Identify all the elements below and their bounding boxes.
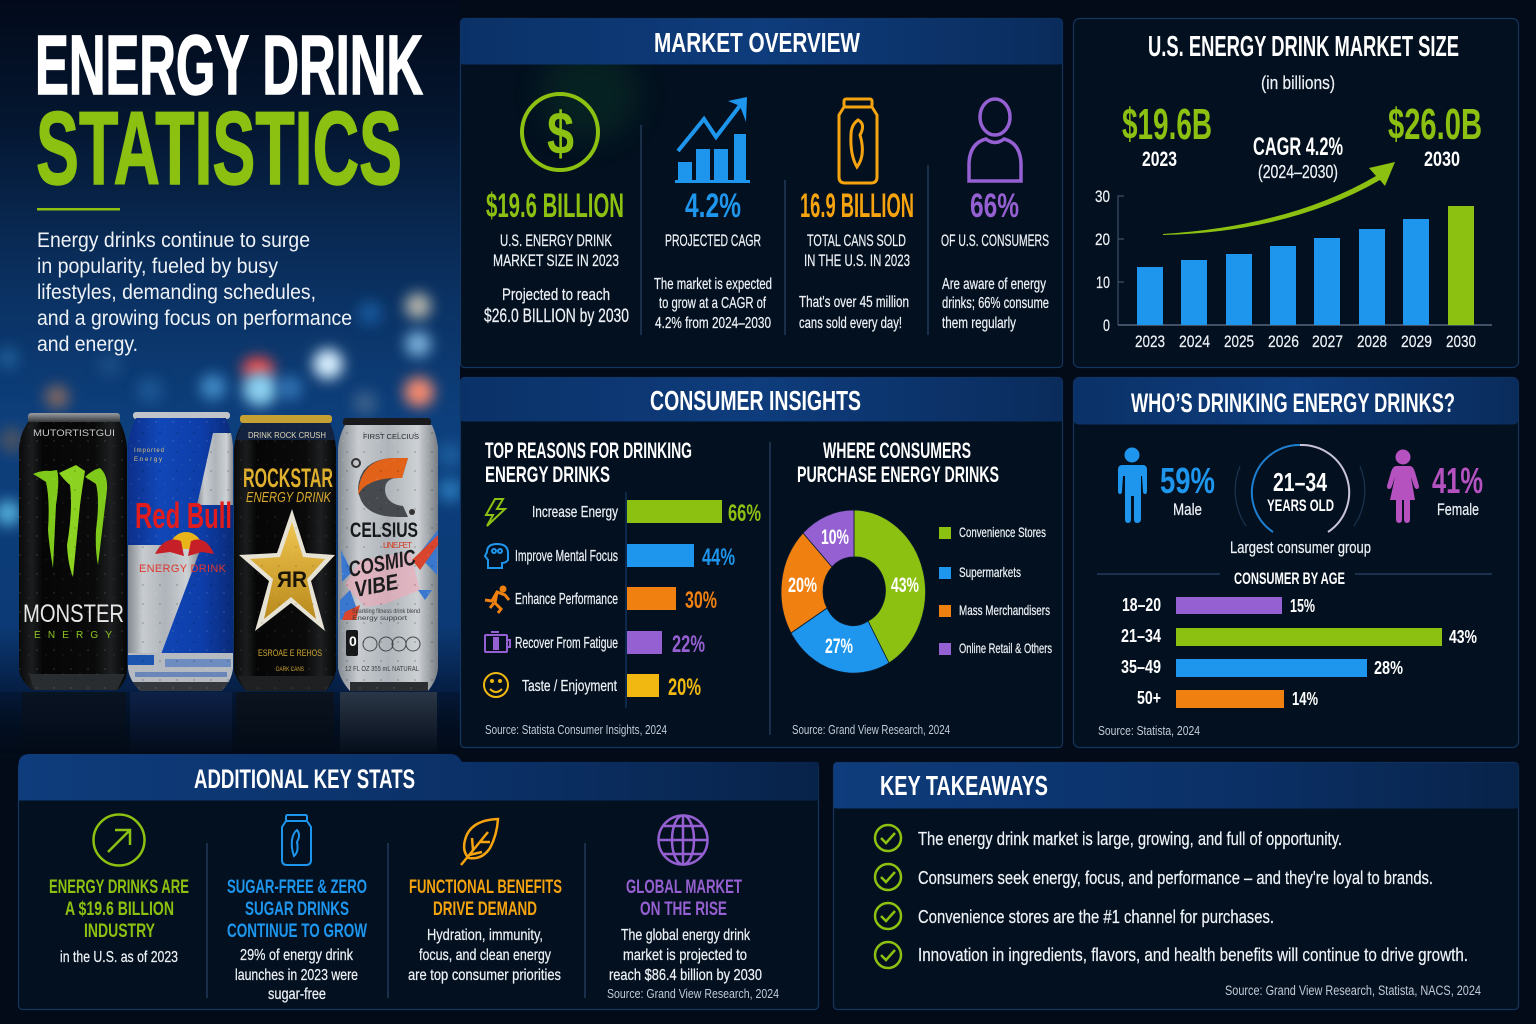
can: Monster: ENERGY — [34, 630, 112, 641]
icon: growth chart — [675, 97, 750, 183]
callout: 2030 value: 2030 — [1424, 148, 1460, 171]
heading: top reasons: TOP REASONS FOR DRINKING — [485, 438, 692, 463]
stat: global market: market is projected to — [623, 947, 747, 964]
stat: market size: U.S. ENERGY DRINK — [500, 231, 612, 250]
stat: sugar-free: 29% of energy drink — [240, 947, 354, 964]
bar chart: top reasons — [484, 492, 761, 708]
can: Celsius: CELSIUS — [350, 519, 418, 542]
donut chart: 10% — [821, 526, 849, 549]
can: Celsius: Energy support — [352, 616, 407, 622]
icon: lightning — [486, 499, 505, 526]
bar chart: top reasons: Improve Mental Focus — [515, 548, 618, 565]
panel: market size chart: (in billions) — [1261, 73, 1335, 93]
can: Rockstar — [234, 415, 336, 691]
can: Celsius: Sparkling fitness drink blend — [352, 609, 420, 615]
bar chart: top reasons: Enhance Performance — [515, 591, 618, 608]
bar chart: top reasons: 66% — [728, 500, 761, 527]
legend: Online Retail & Others — [959, 640, 1052, 656]
bar chart: 2025 — [1224, 332, 1254, 351]
panel: additional key stats — [18, 754, 818, 1010]
takeaway 1: The energy drink market is large, growing, and full of opportunity. — [918, 829, 1342, 849]
stat: global market: ON THE RISE — [640, 899, 727, 920]
stat: consumers: drinks; 66% consume — [942, 295, 1049, 312]
stat: market size: MARKET SIZE IN 2023 — [493, 251, 619, 270]
callout: 2030 value: $26.0B — [1388, 100, 1482, 149]
stat: global market: Source: Grand View Research, 2024 — [607, 986, 779, 1001]
stat: sugar-free: launches in 2023 were — [235, 967, 358, 984]
bar chart: age: 15% — [1290, 596, 1315, 616]
stat: male: 59% — [1160, 460, 1215, 501]
bar chart: top reasons: 44% — [702, 544, 735, 571]
donut chart: 27% — [825, 635, 853, 658]
stat: female: 41% — [1432, 460, 1483, 501]
icon: arrow circle — [94, 814, 144, 866]
bar chart: age: 21–34 — [1121, 626, 1161, 646]
bar chart: top reasons: 30% — [685, 587, 717, 614]
donut chart: 20% — [788, 574, 817, 597]
callout: CAGR: (2024–2030) — [1258, 162, 1338, 182]
bar chart: 2030 — [1446, 332, 1476, 351]
stat: CAGR: 4.2% — [685, 187, 741, 225]
bar chart: 20 — [1095, 230, 1110, 249]
stat: industry — [49, 814, 189, 966]
heading: top reasons — [485, 438, 692, 487]
stat: market size: $26.0 BILLION by 2030 — [484, 306, 629, 327]
legend — [939, 524, 1052, 656]
stat: female: Female — [1437, 500, 1479, 519]
stat: consumers: them regularly — [942, 315, 1016, 332]
intro text: lifestyles, demanding schedules, — [37, 281, 316, 304]
intro text — [37, 229, 352, 356]
heading: market overview — [460, 18, 1062, 64]
bar chart: age: 18–20 — [1122, 595, 1161, 615]
takeaway 2: Consumers seek energy, focus, and performance – and they're loyal to brands. — [918, 868, 1433, 888]
stat: sugar-free: CONTINUE TO GROW — [227, 921, 367, 942]
stat: market size: Projected to reach — [502, 285, 610, 304]
stat: consumers: OF U.S. CONSUMERS — [941, 231, 1049, 250]
stat: CAGR: to grow at a CAGR of — [659, 295, 766, 312]
can: Rockstar: ESROAE E REHOS — [258, 648, 322, 658]
stat: CAGR: PROJECTED CAGR — [665, 231, 761, 250]
heading: additional key stats: ADDITIONAL KEY STATS — [194, 764, 415, 794]
heading: consumer by age: CONSUMER BY AGE — [1234, 569, 1345, 588]
icon: smiley — [484, 673, 508, 697]
stat: market size: $19.6 BILLION — [486, 187, 624, 225]
stat: functional benefits: DRIVE DEMAND — [433, 899, 537, 920]
title — [35, 18, 423, 207]
heading: key takeaways — [834, 762, 1518, 808]
can: Red Bull — [128, 412, 234, 692]
stat: functional benefits: FUNCTIONAL BENEFITS — [409, 877, 562, 898]
heading: who's drinking — [1074, 378, 1518, 424]
stat: consumers: 66% — [970, 187, 1019, 225]
heading: where consumers purchase: WHERE CONSUMERS — [823, 438, 971, 463]
heading: top reasons: ENERGY DRINKS — [485, 462, 610, 487]
intro text: and a growing focus on performance — [37, 307, 352, 330]
stat: functional benefits: focus, and clean energy — [419, 947, 551, 964]
can: Celsius — [338, 418, 438, 691]
callout: 2023 value: $19.6B — [1122, 100, 1212, 149]
takeaway 4 — [875, 942, 1468, 968]
intro text: and energy. — [37, 333, 138, 356]
bar chart: top reasons: 20% — [668, 674, 701, 701]
can: Red Bull: Red Bull — [135, 495, 232, 536]
stat: sugar-free: SUGAR DRINKS — [245, 899, 349, 920]
icon: female — [1387, 450, 1419, 523]
product cans — [0, 412, 460, 754]
stat: functional benefits — [408, 819, 562, 984]
can: Celsius: LINE FET — [383, 541, 412, 550]
stat: industry: INDUSTRY — [84, 921, 155, 942]
icon: battery — [485, 632, 510, 652]
bar chart: age — [1121, 595, 1477, 709]
donut chart: 43% — [891, 574, 919, 597]
bar chart: 2023 — [1135, 332, 1165, 351]
stat: cans sold: IN THE U.S. IN 2023 — [804, 251, 910, 270]
bar chart: 0 — [1103, 316, 1110, 335]
bar chart: age: 28% — [1374, 658, 1403, 678]
heading: additional key stats — [18, 754, 818, 800]
bar chart: age: 50+ — [1137, 688, 1161, 708]
bar chart: top reasons: Recover From Fatigue — [515, 635, 618, 652]
bar chart: 2024 — [1179, 332, 1210, 351]
callout: 2023 value: 2023 — [1142, 148, 1177, 171]
icon: globe — [658, 815, 708, 865]
stat: CAGR: 4.2% from 2024–2030 — [655, 315, 771, 332]
stat: male — [1160, 460, 1215, 519]
stat: consumers: Are aware of energy — [942, 276, 1046, 293]
can reflections — [0, 692, 460, 754]
stat: cans sold: 16.9 BILLION — [800, 187, 914, 225]
can: Monster — [19, 413, 127, 690]
heading: key takeaways: KEY TAKEAWAYS — [880, 770, 1048, 801]
source: takeaways: Source: Grand View Research, Statista, NACS, 2024 — [1225, 983, 1481, 998]
icon: runner — [485, 592, 509, 613]
stat: functional benefits: Hydration, immunity, — [427, 927, 543, 944]
bar chart: 2029 — [1401, 332, 1432, 351]
bar chart: top reasons: Increase Energy — [532, 504, 618, 521]
stat: market size — [484, 94, 629, 327]
callout: CAGR: CAGR 4.2% — [1253, 133, 1343, 161]
legend: Convenience Stores — [959, 524, 1046, 540]
stat: female — [1432, 460, 1483, 519]
takeaway 2 — [875, 864, 1433, 890]
heading: consumer insights: CONSUMER INSIGHTS — [650, 385, 861, 416]
bar chart — [1095, 187, 1492, 351]
can: Red Bull: Imported — [134, 448, 164, 454]
can: Celsius: FIRST CELCIUS — [363, 434, 419, 441]
stat: CAGR: The market is expected — [654, 276, 772, 293]
bar chart: top reasons: 22% — [672, 631, 705, 658]
bar chart: 10 — [1096, 273, 1110, 292]
stat: sugar-free — [227, 815, 367, 1003]
panel: key takeaways — [834, 762, 1518, 1010]
stat: CAGR — [654, 97, 772, 332]
panel: market size chart — [1074, 18, 1518, 368]
stat: global market: GLOBAL MARKET — [626, 877, 742, 898]
heading: market overview: MARKET OVERVIEW — [654, 27, 860, 58]
bar chart: age: 35–49 — [1121, 657, 1161, 677]
callout: age ring — [1235, 445, 1365, 532]
arrow: growth trend — [1163, 162, 1395, 235]
can: Rockstar: ЯR — [277, 567, 307, 592]
source: age: Source: Statista, 2024 — [1098, 723, 1200, 738]
left background with bokeh — [0, 0, 463, 762]
bar chart: age: 14% — [1292, 689, 1318, 709]
can: Red Bull: Energy — [134, 457, 162, 463]
can: Rockstar: DARK CANS — [276, 667, 304, 673]
heading: where consumers purchase — [797, 438, 999, 487]
can: Monster: MONSTER — [23, 600, 124, 628]
bar chart: 2028 — [1357, 332, 1387, 351]
stat: industry: A $19.6 BILLION — [65, 899, 174, 920]
caption: largest group: Largest consumer group — [1230, 538, 1371, 557]
can: Celsius: VIBE — [352, 569, 401, 602]
stat: cans sold: cans sold every day! — [799, 315, 902, 332]
can: Red Bull: ENERGY DRINK — [139, 563, 227, 575]
panel: consumer insights — [460, 378, 1062, 748]
bar chart: top reasons: Taste / Enjoyment — [522, 678, 617, 695]
stat: sugar-free: sugar-free — [268, 986, 326, 1003]
bar chart: 2027 — [1312, 332, 1343, 351]
title: ENERGY DRINK — [35, 18, 423, 112]
icon: head — [485, 544, 508, 568]
can: Celsius: COSMIC — [346, 544, 419, 582]
source: channels: Source: Grand View Research, 2024 — [792, 722, 950, 737]
stat: cans sold: That's over 45 million — [799, 294, 909, 311]
intro text: in popularity, fueled by busy — [37, 255, 278, 278]
legend: Mass Merchandisers — [959, 602, 1050, 618]
stat: functional benefits: are top consumer priorities — [408, 967, 561, 984]
panel: who's drinking — [1074, 378, 1518, 748]
stat: global market — [607, 815, 779, 1001]
stat: sugar-free: SUGAR-FREE & ZERO — [227, 877, 367, 898]
can: Rockstar: ENERGY DRINK — [246, 489, 332, 506]
can: Celsius: 0 — [349, 633, 357, 649]
stat: industry: ENERGY DRINKS ARE — [49, 877, 189, 898]
can: Monster: MUTORTISTGUI — [33, 428, 115, 438]
icon: dollar coin — [522, 94, 598, 170]
panel: market overview — [460, 18, 1062, 368]
stat: consumers — [941, 99, 1049, 332]
icon: dollar coin: $ — [547, 100, 574, 167]
donut chart — [781, 510, 926, 673]
heading: consumer insights — [460, 378, 1062, 422]
icon: person — [969, 99, 1021, 181]
legend: Supermarkets — [959, 564, 1021, 580]
can: Rockstar: DRINK ROCK CRUSH — [248, 431, 326, 440]
heading: where consumers purchase: PURCHASE ENERGY DRINKS — [797, 462, 999, 487]
bar chart: 30 — [1095, 187, 1110, 206]
callout: age ring: 21–34 — [1273, 467, 1327, 497]
takeaway 3 — [875, 903, 1274, 929]
icon: can — [839, 99, 877, 183]
icon: can — [282, 815, 311, 865]
callout: age ring: YEARS OLD — [1267, 496, 1334, 515]
bar chart: age: 43% — [1449, 627, 1477, 647]
bar chart: 2026 — [1268, 332, 1299, 351]
stat: industry: in the U.S. as of 2023 — [60, 949, 178, 966]
stat: cans sold — [799, 99, 914, 332]
callout: 2030 value — [1388, 100, 1482, 171]
can: Celsius: 12 FL OZ 355 mL NATURAL — [345, 666, 419, 673]
takeaway 3: Convenience stores are the #1 channel for purchases. — [918, 907, 1274, 927]
icon: leaf — [461, 819, 498, 865]
stat: cans sold: TOTAL CANS SOLD — [807, 231, 906, 250]
stat: male: Male — [1173, 500, 1202, 519]
source: reasons: Source: Statista Consumer Insights, 2024 — [485, 722, 667, 737]
can: Rockstar: ROCKSTAR — [243, 463, 333, 493]
icon: male — [1118, 448, 1147, 523]
callout: CAGR — [1253, 133, 1343, 182]
title: STATISTICS — [36, 91, 402, 207]
stat: global market: reach $86.4 billion by 2030 — [609, 967, 762, 984]
stat: global market: The global energy drink — [621, 927, 751, 944]
takeaway 1 — [875, 825, 1342, 851]
callout: 2023 value — [1122, 100, 1212, 171]
intro text: Energy drinks continue to surge — [37, 229, 310, 252]
